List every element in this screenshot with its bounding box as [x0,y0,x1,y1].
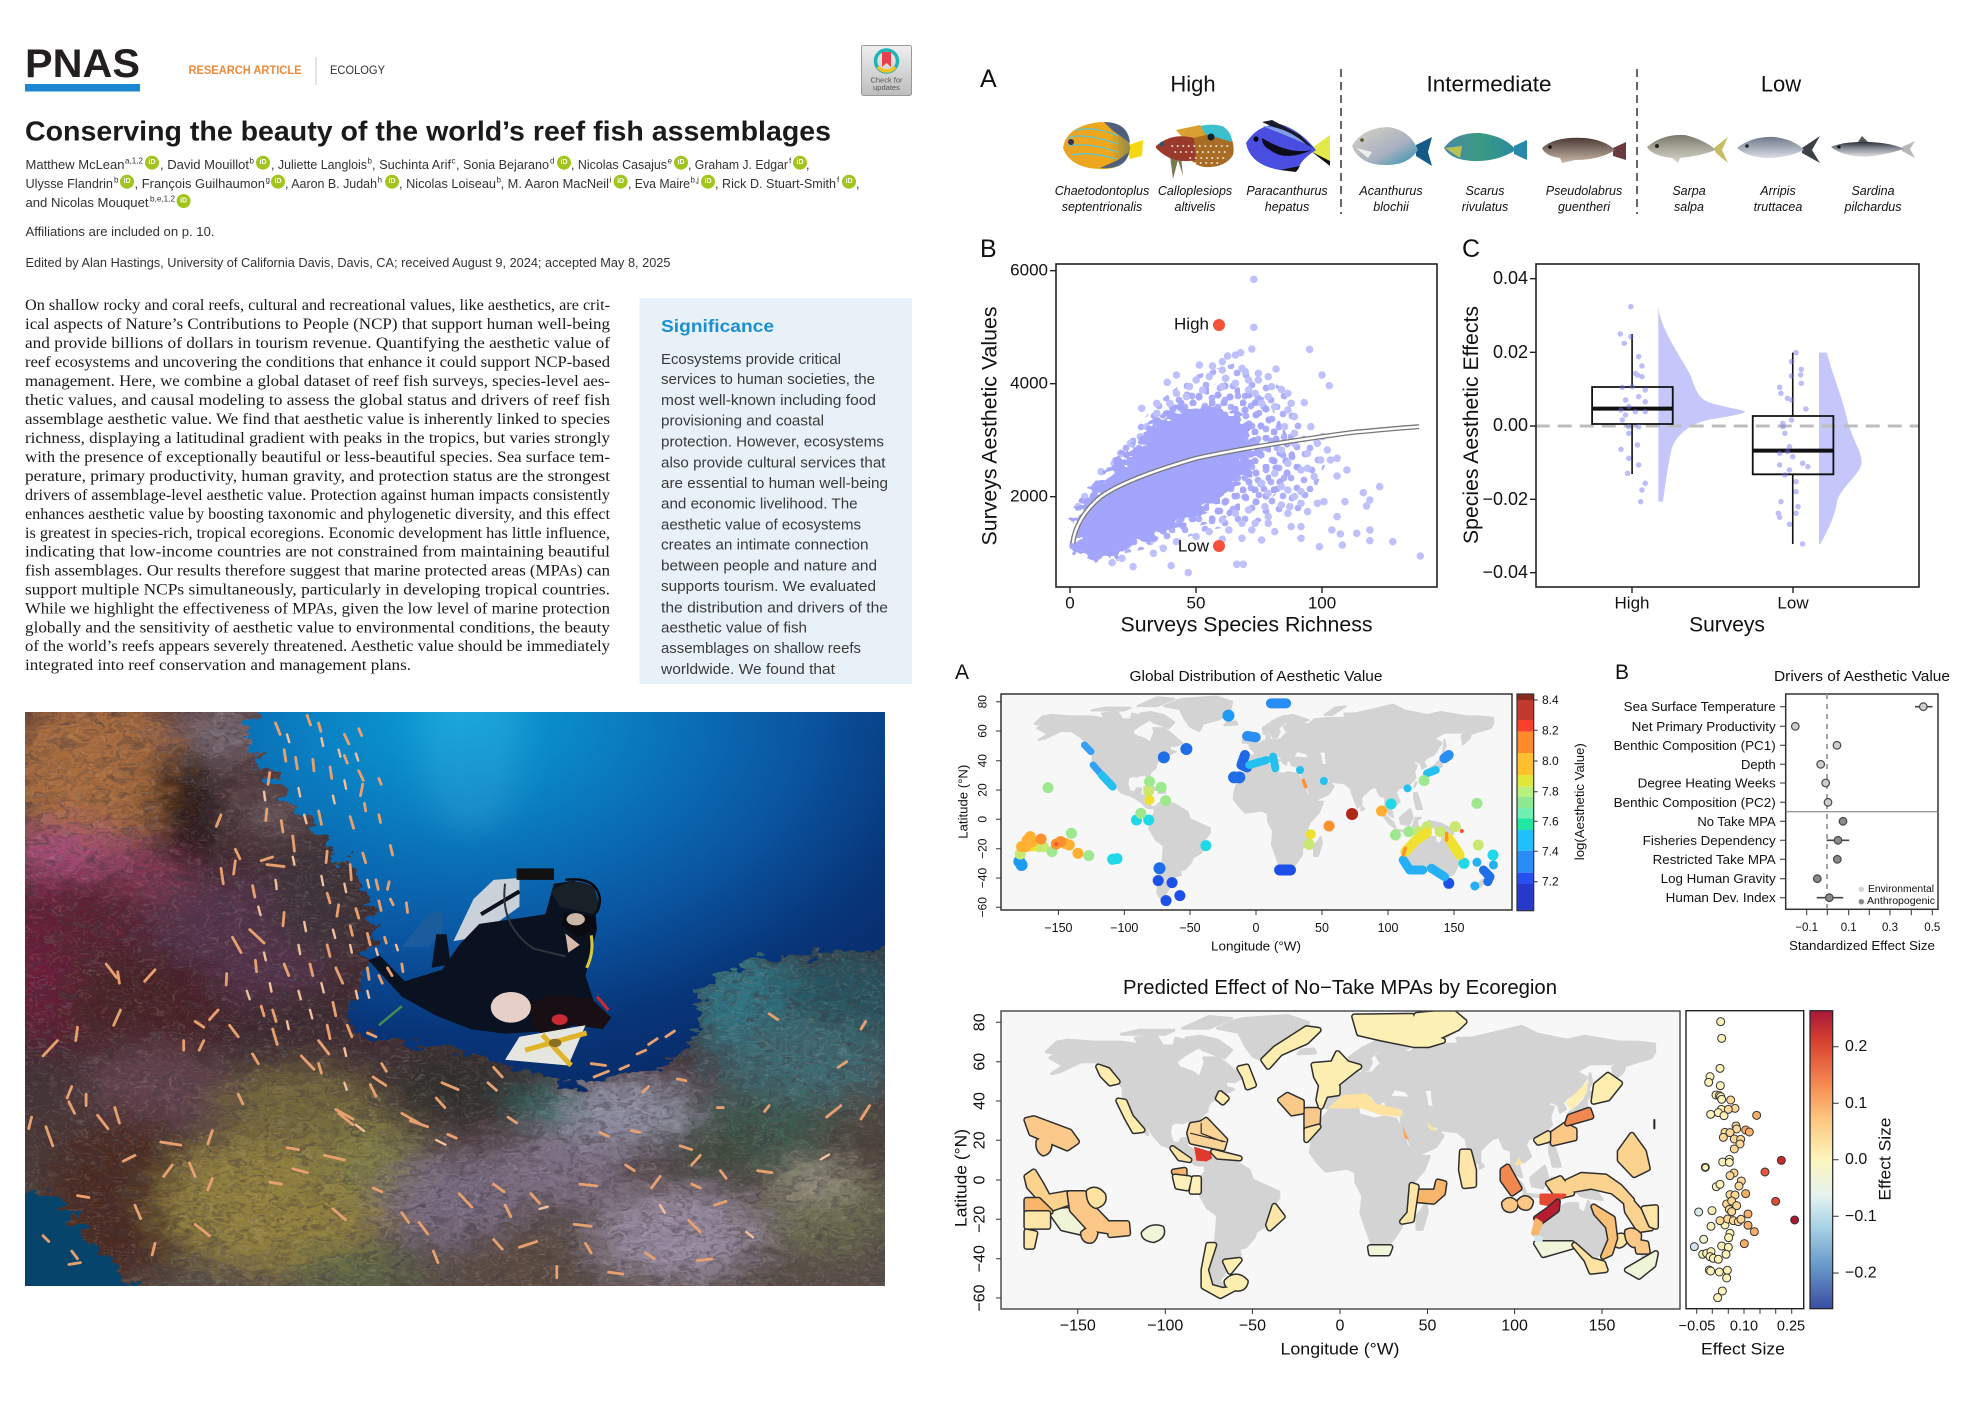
colour bar: log(Aesthetic Value) [1573,743,1587,860]
panel B: drivers of aesthetic value [1614,661,1950,953]
significance body text: aesthetic value of ecosystems [661,517,861,533]
axis labels: 0.1 [1841,922,1857,934]
abstract text block: thetic values, and causal modeling to assess the global status and drivers of reef fish [25,392,610,409]
highlighted points: high and low [1174,314,1225,556]
axis labels [978,260,1372,636]
abstract text block: with the presence of exceptionally beautiful or less-beautiful species. Sea surface tem- [25,449,610,466]
effect size colour bar: 0.0 [1845,1151,1867,1168]
author list: , Nicolas Loiseau [399,177,496,191]
colour bar [1517,693,1587,911]
colour bar: 7.2 [1542,875,1559,889]
species names: pilchardus [1844,200,1901,214]
driver labels: Restricted Take MPA [1653,852,1776,867]
axis labels: Low [1777,594,1809,612]
author list: g [266,176,270,184]
abstract text block: richness, displaying a latitudinal gradient with peaks in the tropics, but varies strongly [25,430,610,447]
author list: iD [617,178,624,185]
author list: , David Mouillot [160,158,250,172]
author list: and Nicolas Mouquet [26,196,149,210]
author list: iD [260,159,266,166]
colour bar: 8.4 [1542,693,1559,707]
axis labels: −0.04 [1482,562,1528,582]
icon: fish Paracanthurus hepatus [1246,120,1330,172]
group heading: intermediate: Intermediate [1426,72,1552,96]
author list: iD [796,159,804,166]
violin: low [1819,353,1862,544]
abstract text block: While we highlight the effectiveness of MPAs, given the low level of marine protection [25,600,610,618]
axis labels: −0.02 [1482,489,1528,509]
author list: h [378,176,382,184]
panel C: species aesthetic effects raincloud: C [1462,235,1480,263]
abstract text block: integrated into reef conservation and management plans. [25,657,411,674]
violin: high [1658,307,1745,502]
map axis labels: −150 [1060,1318,1096,1334]
map axis labels: 100 [1378,921,1398,935]
species names: altivelis [1174,200,1216,214]
author list: iD [704,178,712,185]
author list: , Rick D. Stuart-Smith [715,177,836,191]
author list: , Suchinta Arif [372,158,452,172]
axis labels [1460,268,1809,636]
chart title: Drivers of Aesthetic Value [1774,668,1950,685]
title: Conserving the beauty of the world’s reef fish assemblages [25,116,831,146]
axis labels: 0.10 [1730,1319,1758,1335]
author list: , Sonia Bejarano [456,158,549,172]
panel A: global distribution map [955,661,1587,954]
author list: , François Guilhaumon [134,177,265,191]
map axis labels: 150 [1589,1318,1615,1334]
axis labels: −0.05 [1679,1319,1715,1335]
axis labels: High [1615,594,1649,612]
map axis labels: 0 [1253,921,1260,935]
group heading: low: Low [1761,72,1801,96]
significance body text: are essential to human well-being [661,476,888,492]
effect estimates [1792,703,1932,902]
species names: Scarus [1466,184,1504,198]
map axis labels: −60 [972,1284,988,1312]
author list: b,e,1,2 [150,194,176,204]
axis labels: Standardized Effect Size [1789,939,1935,953]
zero line [1536,424,1919,427]
author list: b [114,176,119,184]
editor note: Edited by Alan Hastings, University of California Davis, Davis, CA; received August 9, 2024; accepted May 8, 2025 [26,256,671,270]
map land and coloured survey sites [1019,697,1493,901]
species names: guentheri [1558,200,1611,214]
abstract text block: support multiple NCPs simultaneously, particularly in developing tropical countries. [25,582,610,598]
author list: iD [678,159,684,166]
axis labels: 0.3 [1882,922,1898,934]
abstract text block: ical aspects of Nature’s Contributions to People (NCP) that support human well-being [25,316,610,333]
author list: , Eva Maire [628,177,690,191]
land and ecoregions [1027,1012,1656,1296]
colour bar: 7.8 [1542,785,1559,799]
abstract text block: is greatest in species-rich, tropical ecoregions. Economic development has little influence, [25,525,610,542]
author list: iD [180,198,187,204]
significance body text: provisioning and coastal [661,414,824,430]
map axis labels: 50 [1419,1318,1436,1334]
significance body text: most well-known including food [661,393,876,409]
axis labels [1789,922,1940,953]
abstract text block: perature, primary productivity, human gravity, and protection status are the strongest [25,468,611,485]
abstract text block: assemblage aesthetic value. We find that aesthetic value is inherently linked to species [25,411,610,428]
author list: iD [388,178,396,185]
axis labels: Effect Size [1701,1340,1785,1358]
significance body text: worldwide. We found that [660,662,835,678]
effect size colour bar: −0.1 [1845,1208,1877,1225]
map axis labels: −40 [972,1245,988,1272]
map axis labels: −60 [976,897,990,917]
axis labels: 6000 [1010,260,1048,280]
species names [1055,184,1901,214]
icon: fish Calloplesiops altivelis [1156,125,1234,179]
group separators [1341,69,1637,214]
species names: Calloplesiops [1158,184,1232,198]
species names: truttacea [1754,200,1802,214]
icon: fish Acanthurus blochii [1352,127,1432,166]
map axis labels: Latitude (°N) [952,1129,970,1227]
species names: septentrionalis [1062,200,1142,214]
significance heading: Significance [661,316,774,336]
map axis labels: −20 [972,1206,988,1233]
author list: Matthew McLean [26,158,125,172]
author list: , [806,158,809,172]
significance body text: services to human societies, the [661,372,875,388]
species names: Sardina [1851,184,1895,198]
author list: a,1,2 [125,156,144,166]
species names: Paracanthurus [1246,184,1328,198]
axis labels: 2000 [1010,486,1048,506]
icon: check for updates badge [862,46,912,96]
section tag: research article and ecology [188,57,385,85]
effect size colour bar [1810,1011,1894,1309]
fit curve [1073,427,1419,543]
box: low [1753,353,1833,544]
significance body text: protection. However, ecosystems [661,434,884,450]
author list: iD [560,159,568,166]
species names: Pseudolabrus [1546,184,1622,198]
driver labels: Benthic Composition (PC2) [1614,795,1776,810]
diver [369,868,611,1065]
panel C: species aesthetic effects raincloud [1460,235,1919,636]
species names: blochii [1373,200,1410,214]
map axis labels: 60 [976,724,990,738]
highlighted points: high and low: Low [1178,536,1210,556]
author list: f [837,176,840,184]
legend [1858,884,1935,907]
icon: fish Scarus rivulatus [1444,133,1527,161]
driver labels: Degree Heating Weeks [1638,776,1776,790]
map axis labels: 50 [1315,921,1329,935]
axis labels [1679,1319,1805,1358]
driver labels: Log Human Gravity [1661,871,1776,886]
panel B: richness vs aesthetic scatter [978,235,1437,636]
map axis labels: Longitude (°W) [1211,938,1301,954]
species names: Sarpa [1672,184,1706,198]
map axis labels: 20 [972,1131,988,1149]
box: high [1592,334,1673,474]
section tag: research article and ecology: ECOLOGY [330,65,385,77]
author list: e [668,156,672,166]
significance body text: assemblages on shallow reefs [661,641,861,657]
map axis labels: −20 [976,838,990,859]
author list [26,156,859,210]
map axis labels: −100 [1110,921,1138,935]
map axis labels [956,695,1464,954]
map axis labels: −50 [1179,921,1201,935]
map axis labels [952,1013,1615,1358]
driver labels: Fisheries Dependency [1643,833,1776,848]
panel: predicted effect of no-take MPAs map [952,977,1680,1358]
significance body text: and economic livelihood. The [661,497,858,513]
author list: iD [274,178,282,185]
author list: f [789,156,792,166]
map axis labels: 100 [1501,1318,1528,1334]
icon: fish Chaetodontoplus septentrionalis [1063,122,1143,169]
jitter points [1620,307,1808,544]
speckled point cloud [1091,363,1327,560]
author list: Ulysse Flandrin [26,177,113,191]
axis labels: 0.5 [1924,922,1940,934]
author list: , [856,177,859,191]
author list: iD [124,178,130,185]
map axis labels: 0 [972,1175,988,1184]
author list: b [496,176,502,184]
panel B: drivers of aesthetic value: B [1615,661,1629,684]
author list: b [250,156,254,166]
colour bar: 8.0 [1542,754,1559,768]
abstract text block: fish assemblages. Our results therefore suggest that marine protected areas (MPAs) can [25,562,610,580]
driver labels: Sea Surface Temperature [1624,699,1776,714]
panel B: richness vs aesthetic scatter: B [980,235,997,263]
significance body text: the distribution and drivers of the [661,600,888,616]
axis labels: 0.04 [1493,268,1528,288]
effect size colour bar: 0.2 [1845,1038,1867,1055]
axis labels: 100 [1308,594,1336,612]
colour bar: 8.2 [1542,723,1559,737]
map axis labels: Latitude (°N) [956,765,970,839]
icon: check for updates badge: Check for [870,76,903,84]
affiliations note: Affiliations are included on p. 10. [26,225,214,239]
map axis labels: −150 [1044,921,1073,935]
map axis labels: 40 [976,754,990,767]
abstract text block: drivers of assemblage-level aesthetic value. Protection against human impacts consistently [25,487,610,504]
map axis labels: 0 [976,816,990,823]
abstract text block [25,297,611,674]
author list: , Graham J. Edgar [688,158,788,172]
author list: , Aaron B. Judah [285,177,377,191]
species names: Chaetodontoplus [1055,184,1149,198]
map axis labels: 60 [972,1053,988,1071]
species names: hepatus [1265,200,1309,214]
author list: b [368,156,372,166]
map axis labels: 80 [972,1013,989,1031]
effect size colour bar: 0.1 [1845,1095,1867,1112]
axis labels: 0.00 [1493,415,1528,435]
abstract text block: indicating that low-income countries are not constrained from maintaining beautiful [25,544,610,560]
map axis labels: −50 [1239,1318,1266,1334]
icon: check for updates badge: updates [873,83,900,92]
map axis labels: 80 [976,695,990,708]
axis labels: 4000 [1010,374,1048,392]
colour bar: 7.6 [1542,814,1559,828]
author list: iD [846,178,852,185]
highlighted points: high and low: High [1174,314,1209,334]
axis labels: 50 [1187,594,1205,612]
author list: , Nicolas Casajus [571,158,667,172]
effect size colour bar: −0.2 [1845,1264,1877,1282]
map axis labels: −40 [976,867,990,888]
author list: d [550,156,554,166]
map axis labels: 0 [1336,1318,1345,1334]
author list: , M. Aaron MacNeil [500,177,609,191]
section tag: research article and ecology: RESEARCH ARTICLE [188,65,302,77]
species names: Acanthurus [1358,184,1423,198]
driver labels: Benthic Composition (PC1) [1614,738,1776,753]
panel A: global distribution map: A [955,661,969,684]
map axis labels: 150 [1444,921,1464,935]
icon: fish Arripis truttacea [1737,136,1820,163]
axis labels: −0.1 [1795,922,1818,934]
map axis labels: Longitude (°W) [1280,1340,1400,1358]
significance body text: between people and nature and [661,559,877,575]
significance body text [660,352,888,678]
significance body text: Ecosystems provide critical [661,352,841,368]
species names: rivulatus [1462,200,1508,214]
significance body text: aesthetic value of fish [661,621,807,637]
panel A label: fish groups: A [980,65,997,93]
axis labels: Surveys Species Richness [1120,614,1372,636]
axis labels: 0.25 [1777,1319,1805,1335]
group heading: high: High [1170,72,1216,96]
map title: Global Distribution of Aesthetic Value [1130,668,1382,685]
species names: salpa [1674,200,1704,214]
effect size colour bar: Effect Size [1876,1118,1894,1200]
panel: significance [640,298,912,684]
legend: Anthropogenic [1867,896,1935,907]
map axis labels: −100 [1147,1318,1183,1334]
map axis labels: 20 [976,783,990,797]
scatter points [1071,279,1420,573]
icon: fish Pseudolabrus guentheri [1542,138,1626,163]
author list: b,j [690,176,699,184]
axis labels: 0 [1065,594,1075,612]
axis labels: 0.02 [1493,342,1528,362]
abstract text block: enhances aesthetic value by boosting taxonomic and phylogenetic diversity, and this effect [25,506,611,523]
abstract text block: and provide billions of dollars in tourism revenue. Quantifying the aesthetic value of [25,335,611,352]
author list: iD [148,159,156,166]
axis labels: Surveys Aesthetic Values [978,306,1002,546]
abstract text block: of the world’s reefs appears severely threatened. Aesthetic value should be immediately [25,638,610,655]
abstract text block: globally and the sensitivity of aesthetic value to environmental conditions, the beauty [25,620,610,636]
abstract text block: On shallow rocky and coral reefs, cultural and recreational values, like aesthetics, are crit- [25,297,610,314]
panel: effect size strip plot [1679,1011,1805,1358]
anthias fish school [29,715,870,1278]
icon: fish Sardina pilchardus [1831,136,1915,158]
colour bar: 7.4 [1542,844,1559,858]
significance body text: also provide cultural services that [661,455,886,471]
legend: Environmental [1868,884,1934,895]
author list: i [610,176,612,184]
driver labels [1614,699,1776,905]
species names: Arripis [1759,184,1796,198]
abstract text block: reef ecosystems and uncovering the conditions that enhance it could support NCP-based [25,354,610,371]
photo: diver on coral reef [25,712,885,1286]
driver labels: Human Dev. Index [1666,890,1776,905]
significance body text: supports tourism. We evaluated [661,579,876,595]
map axis labels: 40 [972,1092,988,1110]
icon: fish Sarpa salpa [1647,135,1728,163]
driver labels: Net Primary Productivity [1632,719,1776,734]
header: PNAS logo: PNAS [25,42,140,86]
significance body text: creates an intimate connection [661,538,868,554]
driver labels: Depth [1741,757,1776,772]
map title: Predicted Effect of No−Take MPAs by Ecoregion [1123,977,1557,999]
driver labels: No Take MPA [1697,814,1776,829]
axis labels: Surveys [1689,614,1765,636]
axis labels: Species Aesthetic Effects [1460,306,1483,544]
author list: c [452,156,456,166]
abstract text block: management. Here, we combine a global dataset of reef fish surveys, species-level aes- [25,373,610,390]
ecoregion effect points [1690,1018,1799,1302]
author list: , Juliette Langlois [271,158,367,172]
